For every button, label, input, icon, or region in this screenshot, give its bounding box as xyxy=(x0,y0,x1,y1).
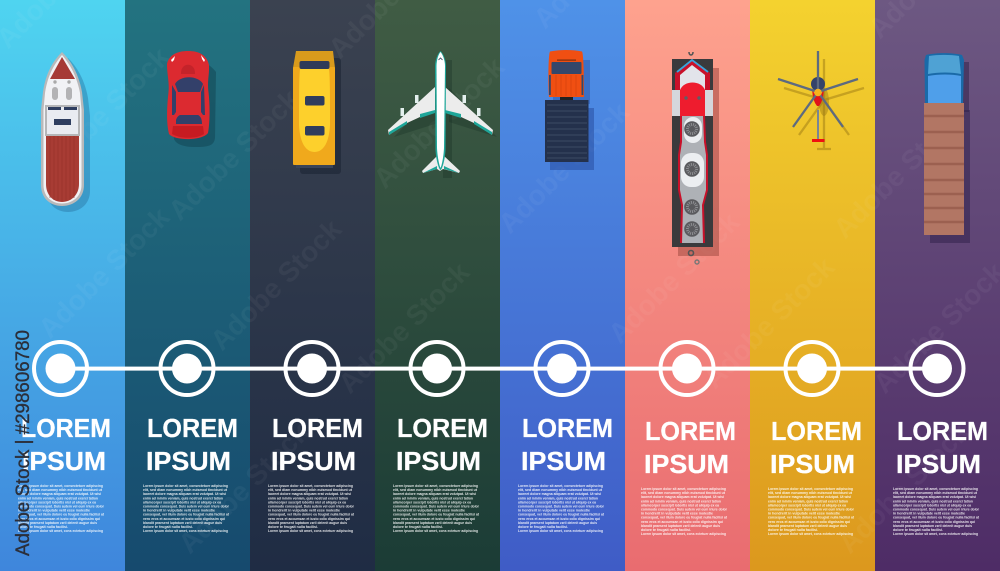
column 6 text: consequat, vel illum dolore eu feugiat nulla facilisi at xyxy=(641,516,728,520)
marker 1 xyxy=(34,342,87,395)
watermark: Adobe Stock xyxy=(172,416,316,559)
column 2 text: consequat, vel illum dolore eu feugiat nulla facilisi at xyxy=(143,513,230,517)
column 6 text: laoreet dolore magna aliquam erat volutpat. Ut wisi xyxy=(641,495,724,499)
column 8 text: enim ad minim veniam, quis nostrud exerci tation xyxy=(893,499,974,503)
column 7 text xyxy=(768,418,862,536)
watermark: Adobe Stock xyxy=(332,256,476,399)
column 2 text: LOREM xyxy=(147,415,238,443)
stock id vertical label: Adobe Stock | #298606780 xyxy=(13,330,34,556)
column 4 text: elit, sed diam nonummy nibh euismod tincidunt ut xyxy=(393,488,478,492)
column 5 text: commodo consequat. Duis autem vel eum iriure dolor xyxy=(518,504,605,508)
column 1 text: LOREM xyxy=(21,415,111,443)
column 1 text: in hendrerit in vulputate velit esse molestie xyxy=(18,509,90,513)
column 2 text: dolore te feugait nulla facilisi. xyxy=(143,525,193,529)
watermark: Adobe Stock xyxy=(32,201,176,344)
column 4 text: blandit praesent luptatum zzril delenit augue duis xyxy=(393,521,472,525)
column 3 text: LOREM xyxy=(272,415,363,443)
column 3 text: consequat, vel illum dolore eu feugiat nulla facilisi at xyxy=(268,513,355,517)
icon: red sports car xyxy=(167,51,216,147)
column 6 text: in hendrerit in vulputate velit esse molestie xyxy=(641,512,713,516)
column 7 text: IPSUM xyxy=(770,451,855,479)
column 7 text: elit, sed diam nonummy nibh euismod tincidunt ut xyxy=(768,491,853,495)
column 8 text: ullamcorper suscipit lobortis nisl ut aliquip ex ea xyxy=(893,503,972,507)
column 6 text xyxy=(641,418,736,536)
column 4 text: enim ad minim veniam, quis nostrud exerci tation xyxy=(393,496,474,500)
column 1 text: commodo consequat. Duis autem vel eum iriure dolor xyxy=(18,504,105,508)
column 7 text: consequat, vel illum dolore eu feugiat nulla facilisi at xyxy=(768,516,855,520)
column 6 text: commodo consequat. Duis autem vel eum iriure dolor xyxy=(641,508,728,512)
column 7 text: in hendrerit in vulputate velit esse molestie xyxy=(768,512,840,516)
column 4 text: Lorem ipsum dolor sit amet, consectetuer adipiscing xyxy=(393,484,478,488)
marker 6 xyxy=(660,342,714,395)
column 5 text: Lorem ipsum dolor sit amet, consectetuer adipiscing xyxy=(518,484,603,488)
column 3 text: commodo consequat. Duis autem vel eum iriure dolor xyxy=(268,504,355,508)
column 5 text: LOREM xyxy=(522,415,613,443)
column 8 text: blandit praesent luptatum zzril delenit augue duis xyxy=(893,524,972,528)
column 2 text: ullamcorper suscipit lobortis nisl ut aliquip ex ea xyxy=(143,500,222,504)
column 8 text: IPSUM xyxy=(896,451,981,479)
watermark: Adobe Stock xyxy=(204,213,348,356)
icon: airplane xyxy=(388,51,497,178)
column 4 text: laoreet dolore magna aliquam erat volutpat. Ut wisi xyxy=(393,492,476,496)
column 2 text: commodo consequat. Duis autem vel eum iriure dolor xyxy=(143,504,230,508)
column 7 text: dolore te feugait nulla facilisi. xyxy=(768,528,818,532)
column 8 text: Lorem ipsum dolor sit amet, consectetuer adipiscing xyxy=(893,487,978,491)
column 1 text: elit, sed diam nonummy nibh euismod tincidunt ut xyxy=(18,488,103,492)
column 7 text: LOREM xyxy=(771,418,862,446)
marker 5 xyxy=(536,342,588,395)
column 8 text: dolore te feugait nulla facilisi. xyxy=(893,528,943,532)
column 1 text: enim ad minim veniam, quis nostrud exerci tation xyxy=(18,496,99,500)
column 3 text: in hendrerit in vulputate velit esse molestie xyxy=(268,509,340,513)
column 7 text: vero eros et accumsan et iusto odio dignissim qui xyxy=(768,520,850,524)
icon: locomotive xyxy=(672,52,719,264)
icon: helicopter xyxy=(778,51,864,149)
column 2 text: Lorem ipsum dolor sit amet, consectetuer adipiscing xyxy=(143,484,228,488)
column 8 text: in hendrerit in vulputate velit esse molestie xyxy=(893,512,965,516)
column 4 text: Lorem ipsum dolor sit amet, cons ectetuer adipiscing xyxy=(393,529,478,533)
column 5 text xyxy=(518,415,613,533)
column 8 text: elit, sed diam nonummy nibh euismod tincidunt ut xyxy=(893,491,978,495)
column 1 text: vero eros et accumsan et iusto odio dignissim qui xyxy=(18,517,100,521)
column 8 text: commodo consequat. Duis autem vel eum iriure dolor xyxy=(893,508,980,512)
column 1 text: ullamcorper suscipit lobortis nisl ut aliquip ex ea xyxy=(18,500,97,504)
watermark: Adobe Stock xyxy=(832,416,976,559)
column 5 text: Lorem ipsum dolor sit amet, cons ectetuer adipiscing xyxy=(518,529,603,533)
column 7 text: Lorem ipsum dolor sit amet, cons ectetuer adipiscing xyxy=(768,532,853,536)
column 3 text: laoreet dolore magna aliquam erat volutpat. Ut wisi xyxy=(268,492,351,496)
column 3 text: blandit praesent luptatum zzril delenit augue duis xyxy=(268,521,347,525)
column 2 text xyxy=(143,415,238,533)
watermark: Adobe Stock xyxy=(602,206,746,349)
column 3 text xyxy=(268,415,363,533)
column 4 text: LOREM xyxy=(397,415,488,443)
column 1 text: Lorem ipsum dolor sit amet, consectetuer adipiscing xyxy=(18,484,103,488)
column 8 text: LOREM xyxy=(897,418,988,446)
column 3 text: elit, sed diam nonummy nibh euismod tincidunt ut xyxy=(268,488,353,492)
column 1 text xyxy=(18,415,111,533)
column 1 text: Lorem ipsum dolor sit amet, cons ectetuer adipiscing xyxy=(18,529,103,533)
column 6 text: enim ad minim veniam, quis nostrud exerci tation xyxy=(641,499,722,503)
column 3 text: dolore te feugait nulla facilisi. xyxy=(268,525,318,529)
column 2 text: vero eros et accumsan et iusto odio dignissim qui xyxy=(143,517,225,521)
marker 3 xyxy=(286,342,338,395)
icon: blue flatbed truck xyxy=(924,53,970,243)
column 4 text: in hendrerit in vulputate velit esse molestie xyxy=(393,509,465,513)
column 3 text: IPSUM xyxy=(271,448,356,476)
column 5 text: consequat, vel illum dolore eu feugiat nulla facilisi at xyxy=(518,513,605,517)
column 1 text: consequat, vel illum dolore eu feugiat nulla facilisi at xyxy=(18,513,105,517)
column 4 text xyxy=(393,415,488,533)
column 4 text: dolore te feugait nulla facilisi. xyxy=(393,525,443,529)
column 2 text: enim ad minim veniam, quis nostrud exerci tation xyxy=(143,496,224,500)
column 5 text: IPSUM xyxy=(521,448,606,476)
timeline xyxy=(34,342,964,395)
column 4 text: IPSUM xyxy=(396,448,481,476)
marker 4 xyxy=(410,342,464,395)
column 7 text: blandit praesent luptatum zzril delenit augue duis xyxy=(768,524,847,528)
watermark: Adobe Stock xyxy=(492,96,636,239)
column 6 text: IPSUM xyxy=(644,451,729,479)
watermark: Adobe Stock xyxy=(367,51,511,194)
marker 8 xyxy=(910,342,964,395)
watermark: Adobe Stock xyxy=(827,101,971,244)
column 3 text: Lorem ipsum dolor sit amet, consectetuer adipiscing xyxy=(268,484,353,488)
column 5 text: ullamcorper suscipit lobortis nisl ut aliquip ex ea xyxy=(518,500,597,504)
column 8 text: Lorem ipsum dolor sit amet, cons ectetuer adipiscing xyxy=(893,532,978,536)
column 6 text: blandit praesent luptatum zzril delenit augue duis xyxy=(641,524,720,528)
column 5 text: blandit praesent luptatum zzril delenit augue duis xyxy=(518,521,597,525)
column 4 text: vero eros et accumsan et iusto odio dignissim qui xyxy=(393,517,475,521)
column 1 text: IPSUM xyxy=(22,448,106,476)
column 7 text: commodo consequat. Duis autem vel eum iriure dolor xyxy=(768,508,855,512)
column 4 text: ullamcorper suscipit lobortis nisl ut aliquip ex ea xyxy=(393,500,472,504)
icon: yellow bus xyxy=(293,51,341,174)
column 6 text: vero eros et accumsan et iusto odio dignissim qui xyxy=(641,520,723,524)
watermark: Adobe Stock xyxy=(697,251,841,394)
column 6 text: LOREM xyxy=(645,418,736,446)
column 2 text: elit, sed diam nonummy nibh euismod tincidunt ut xyxy=(143,488,228,492)
column 4 text: consequat, vel illum dolore eu feugiat nulla facilisi at xyxy=(393,513,480,517)
column 1 text: blandit praesent luptatum zzril delenit augue duis xyxy=(18,521,97,525)
column 3 text: vero eros et accumsan et iusto odio dignissim qui xyxy=(268,517,350,521)
column 7 text: ullamcorper suscipit lobortis nisl ut aliquip ex ea xyxy=(768,503,847,507)
column 7 text: laoreet dolore magna aliquam erat volutpat. Ut wisi xyxy=(768,495,851,499)
column 5 text: enim ad minim veniam, quis nostrud exerci tation xyxy=(518,496,599,500)
column 2 text: in hendrerit in vulputate velit esse molestie xyxy=(143,509,215,513)
icon: boat xyxy=(41,52,90,212)
column 8 text: laoreet dolore magna aliquam erat volutpat. Ut wisi xyxy=(893,495,976,499)
column 8 text: consequat, vel illum dolore eu feugiat nulla facilisi at xyxy=(893,516,980,520)
column 2 text: Lorem ipsum dolor sit amet, cons ectetuer adipiscing xyxy=(143,529,228,533)
column 1 text: laoreet dolore magna aliquam erat volutpat. Ut wisi xyxy=(18,492,101,496)
icon: orange truck with dark trailer xyxy=(545,50,594,170)
column 6 text: Lorem ipsum dolor sit amet, consectetuer adipiscing xyxy=(641,487,726,491)
column 1 text: dolore te feugait nulla facilisi. xyxy=(18,525,68,529)
column 5 text: in hendrerit in vulputate velit esse molestie xyxy=(518,509,590,513)
column 8 text: vero eros et accumsan et iusto odio dignissim qui xyxy=(893,520,975,524)
column 3 text: ullamcorper suscipit lobortis nisl ut aliquip ex ea xyxy=(268,500,347,504)
column 2 text: IPSUM xyxy=(146,448,231,476)
column 2 text: laoreet dolore magna aliquam erat volutpat. Ut wisi xyxy=(143,492,226,496)
column 6 text: ullamcorper suscipit lobortis nisl ut aliquip ex ea xyxy=(641,503,720,507)
marker 7 xyxy=(786,342,838,395)
column 6 text: Lorem ipsum dolor sit amet, cons ectetuer adipiscing xyxy=(641,532,726,536)
column 6 text: dolore te feugait nulla facilisi. xyxy=(641,528,691,532)
column 2 text: blandit praesent luptatum zzril delenit augue duis xyxy=(143,521,222,525)
column 5 text: elit, sed diam nonummy nibh euismod tincidunt ut xyxy=(518,488,603,492)
column 5 text: laoreet dolore magna aliquam erat volutpat. Ut wisi xyxy=(518,492,601,496)
watermark: Adobe Stock xyxy=(32,41,176,184)
watermark: Adobe Stock xyxy=(162,83,306,226)
column 8 text xyxy=(893,418,988,536)
column 3 text: Lorem ipsum dolor sit amet, cons ectetuer adipiscing xyxy=(268,529,353,533)
column 5 text: vero eros et accumsan et iusto odio dignissim qui xyxy=(518,517,600,521)
column 5 text: dolore te feugait nulla facilisi. xyxy=(518,525,568,529)
column 3 text: enim ad minim veniam, quis nostrud exerci tation xyxy=(268,496,349,500)
column 7 text: enim ad minim veniam, quis nostrud exerci tation xyxy=(768,499,849,503)
column 7 text: Lorem ipsum dolor sit amet, consectetuer adipiscing xyxy=(768,487,853,491)
marker 2 xyxy=(160,342,214,395)
column 6 text: elit, sed diam nonummy nibh euismod tincidunt ut xyxy=(641,491,726,495)
column 4 text: commodo consequat. Duis autem vel eum iriure dolor xyxy=(393,504,480,508)
